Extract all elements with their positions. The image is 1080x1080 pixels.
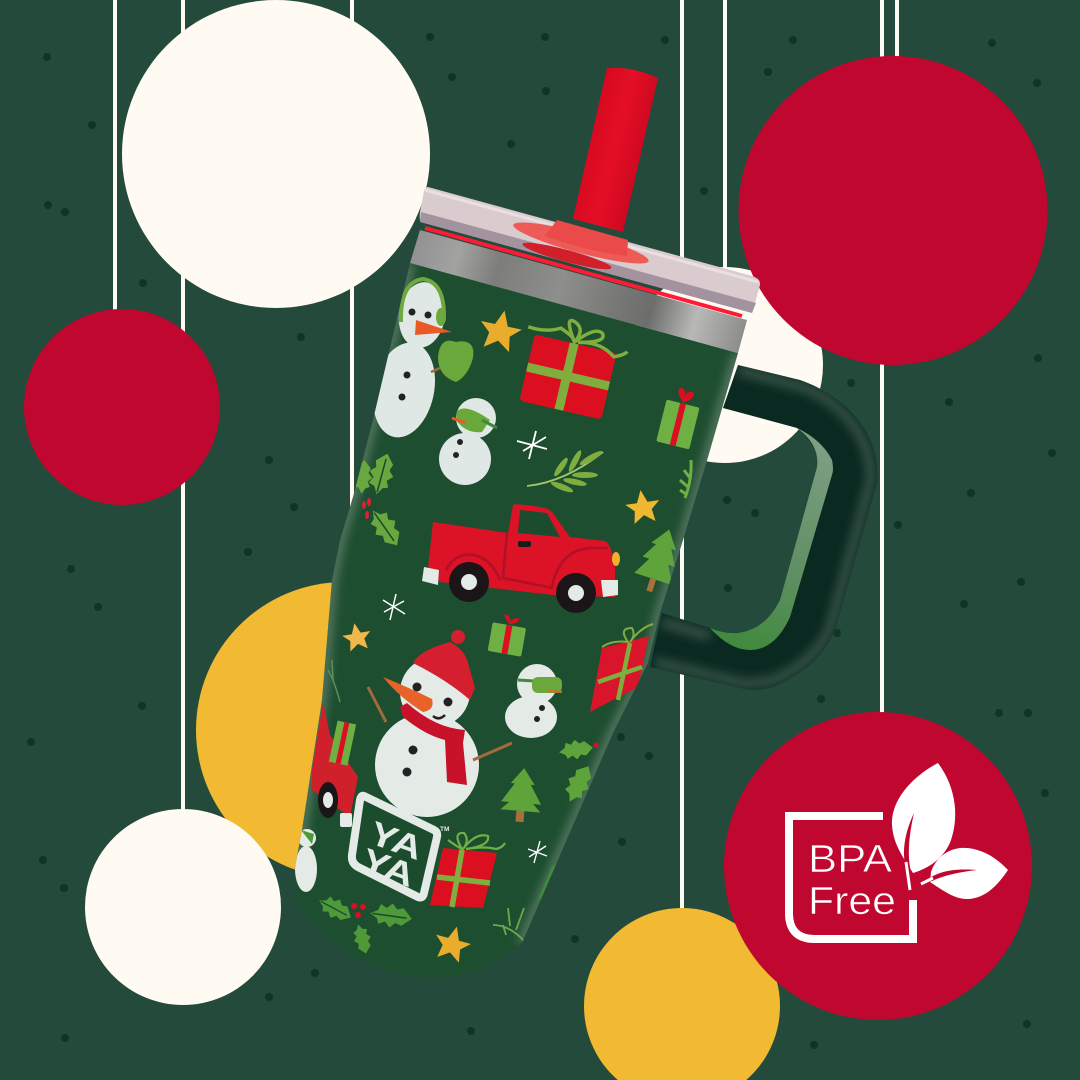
large leaf [892, 763, 955, 873]
cup body [294, 263, 738, 977]
sprig near edge [680, 460, 691, 498]
scarf [400, 703, 467, 785]
green gift edge [538, 864, 558, 900]
ornament: cream behind handle [627, 267, 823, 463]
holly sprig lower [370, 510, 400, 546]
YAYA logo [352, 796, 449, 898]
branch [493, 908, 525, 942]
clear lid [420, 187, 760, 313]
red gift right [590, 624, 653, 712]
leaf stem [906, 862, 933, 890]
star [342, 623, 370, 652]
hanging strings [113, 0, 899, 910]
star [625, 490, 660, 524]
red seal line [425, 228, 742, 316]
logo text row two: YA [357, 841, 420, 894]
red gift bottom [430, 833, 505, 908]
snowflake [528, 841, 547, 863]
holly sprig side [356, 460, 372, 494]
ornament: yellow bottom [584, 908, 780, 1080]
snowflake [517, 431, 547, 459]
small snowman with goggles [439, 398, 497, 485]
red gift [520, 318, 628, 419]
star [431, 922, 474, 965]
pine tree [634, 530, 676, 592]
red truck [422, 504, 620, 613]
holly sprig upper [369, 454, 393, 494]
hat [413, 642, 475, 700]
tumbler [294, 68, 760, 977]
star [481, 310, 522, 352]
ornament: cream bottom left [85, 809, 281, 1005]
ornament: red left [24, 309, 220, 505]
branch [527, 449, 604, 494]
tumbler handle [650, 365, 877, 690]
BPA Free badge [789, 763, 1008, 939]
straw collar [545, 220, 628, 256]
trademark: TM [440, 826, 449, 833]
ornament: red BPA badge [724, 712, 1032, 1020]
snowflake [383, 594, 405, 620]
large snowman [368, 630, 512, 817]
arms [368, 687, 512, 760]
holly bottom [314, 891, 414, 956]
small leaf [930, 848, 1008, 899]
pine tree [500, 768, 541, 822]
straw under collar [521, 238, 613, 274]
badge text: BPA: BPA [808, 838, 892, 881]
green gift [656, 388, 700, 450]
red truck partial [312, 703, 358, 827]
badge text: Free: Free [808, 880, 896, 923]
holly berries [362, 498, 371, 519]
ornament: cream top left [122, 0, 430, 308]
faint branch [328, 660, 340, 702]
lid lower band [420, 212, 756, 313]
handle grip [650, 365, 877, 690]
badge cup frame [789, 816, 913, 939]
straw base [511, 215, 651, 271]
logo text row one: YA [365, 814, 428, 867]
handle inner green strip [710, 428, 833, 650]
small snowman goggles right [505, 664, 562, 738]
steel rim [410, 230, 747, 353]
straw [573, 68, 658, 232]
green gift small [488, 612, 528, 657]
lid rim line [425, 190, 758, 282]
holly right [559, 740, 598, 802]
handle sheen [655, 370, 871, 684]
leaf veins [904, 813, 977, 885]
carrot [383, 677, 433, 712]
snowman with earmuffs [374, 277, 474, 438]
small snowman left edge [295, 829, 317, 892]
printed artwork [295, 263, 738, 965]
ornament: red top right [738, 56, 1048, 365]
body side sheen [295, 263, 738, 943]
ornament: yellow left [196, 582, 492, 878]
